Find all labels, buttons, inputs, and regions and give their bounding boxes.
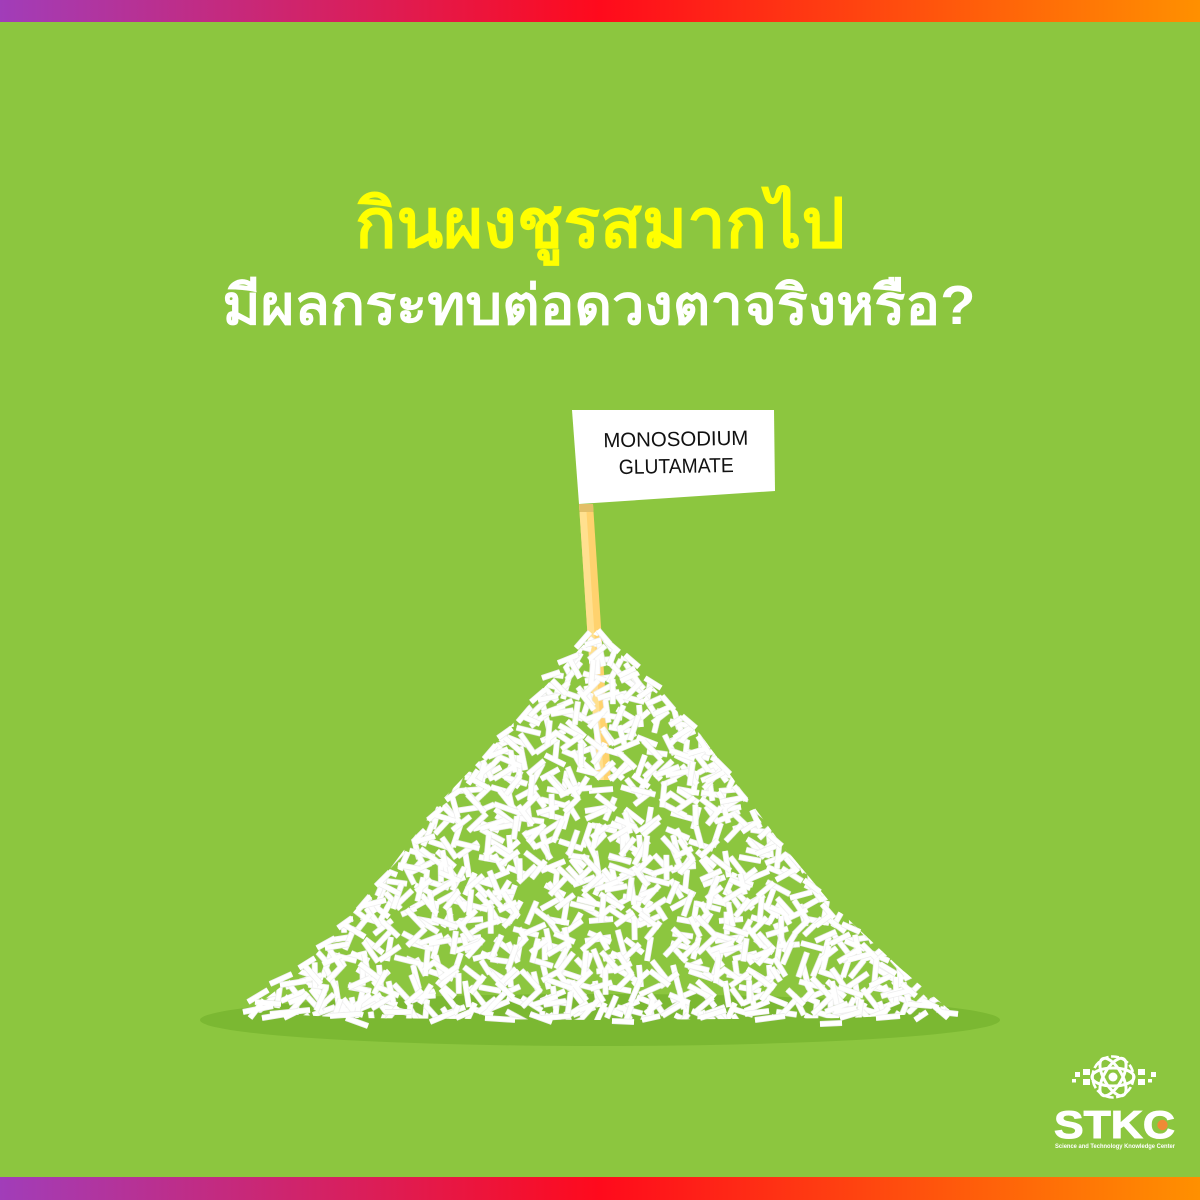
- flag label: [603, 427, 749, 479]
- logo pixel squares: [1072, 1069, 1156, 1085]
- flag stick: [579, 504, 611, 780]
- ground shadow: [200, 994, 1000, 1046]
- flag: [572, 410, 775, 780]
- flag label: GLUTAMATE: [619, 454, 734, 479]
- title line 2: มีผลกระทบต่อดวงตาจริงหรือ?: [222, 274, 976, 336]
- top gradient bar: [0, 0, 1200, 22]
- flag label: MONOSODIUM: [603, 427, 749, 452]
- logo wordmark: STKC: [1054, 1104, 1175, 1147]
- pile body crystals: [258, 630, 950, 1020]
- logo atom icon: [1092, 1054, 1134, 1100]
- logo orange dot: [1157, 1120, 1168, 1130]
- title: [222, 184, 976, 336]
- pile edge crystals: [243, 630, 958, 1026]
- flag banner: [572, 410, 775, 504]
- bottom gradient bar: [0, 1177, 1200, 1200]
- STKC logo: [1054, 1054, 1176, 1150]
- pile of monosodium glutamate crystals: [230, 620, 970, 1030]
- logo tagline: Science and Technology Knowledge Center: [1055, 1143, 1176, 1150]
- title line 1: กินผงชูรสมากไป: [355, 184, 845, 267]
